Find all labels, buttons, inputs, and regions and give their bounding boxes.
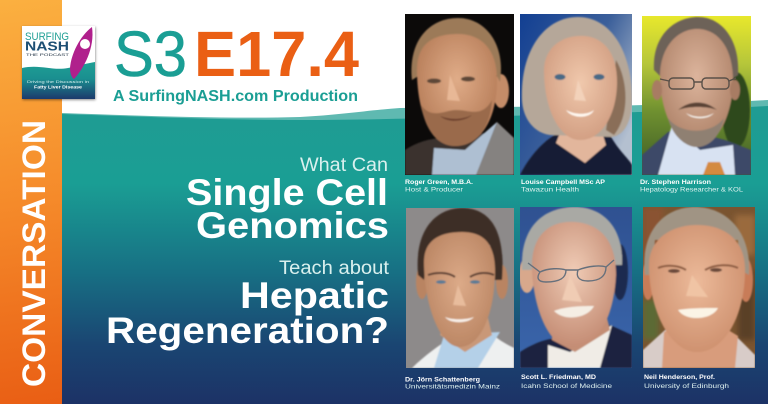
caption: Louise Campbell: Louise Campbell MSc AP: [521, 180, 605, 186]
episode: E17.4: [194, 18, 359, 90]
logo surfboard: [70, 27, 93, 79]
caption: Stephen Harrison: [640, 180, 744, 194]
caption: Neil Henderson: Neil Henderson, Prof.: [644, 375, 715, 381]
caption: Louise Campbell: [521, 180, 605, 194]
headline line: Genomics: Genomics: [196, 205, 389, 246]
glasses: [660, 78, 736, 89]
caption: Jörn Schattenberg: Dr. Jörn Schattenberg: [405, 378, 480, 384]
caption: Stephen Harrison: Hepatology Researcher & KOL: [640, 186, 744, 194]
caption: Roger Green: Roger Green, M.B.A.: [405, 180, 473, 186]
episode code: [114, 18, 359, 90]
headline line: Single Cell: Single Cell: [186, 172, 388, 213]
portrait: Roger Green: [405, 14, 514, 175]
sea gradient panel with wave top: [62, 100, 768, 404]
logo lower wave: [22, 62, 95, 99]
glasses: [528, 260, 614, 282]
caption: Stephen Harrison: Dr. Stephen Harrison: [640, 180, 711, 186]
caption row 2: [405, 375, 730, 390]
caption row 1: [405, 180, 744, 194]
orange side bar: [0, 0, 62, 404]
logo subtitle: Driving the Discussion in: [27, 79, 89, 84]
headline line: Teach about: Teach about: [279, 258, 390, 279]
podcast logo: [22, 26, 95, 99]
season: S3: [114, 18, 187, 90]
headline: [106, 155, 390, 351]
caption: Roger Green: [405, 180, 473, 194]
portrait: Neil Henderson: [642, 207, 755, 368]
caption: Roger Green: Host & Producer: [405, 186, 463, 194]
portrait: Stephen Harrison: [642, 16, 751, 175]
logo tagline: THE PODCAST: [26, 52, 70, 57]
logo title SURFING: SURFING: [25, 31, 69, 43]
caption: Scott Friedman: Scott L. Friedman, MD: [521, 375, 597, 381]
portrait: Jörn Schattenberg: [406, 208, 514, 368]
portrait: Scott Friedman: [519, 207, 632, 368]
caption: Jörn Schattenberg: [405, 378, 500, 390]
vertical label: CONVERSATION: CONVERSATION: [16, 120, 52, 387]
headline line: Regeneration?: Regeneration?: [106, 310, 389, 351]
headline line: Hepatic: Hepatic: [240, 275, 389, 316]
caption: Jörn Schattenberg: Universitätsmedizin Mainz: [405, 384, 500, 390]
logo subtitle bold: Fatty Liver Disease: [34, 84, 83, 90]
caption: Scott Friedman: Icahn School of Medicine: [521, 383, 613, 390]
headline line: What Can: What Can: [300, 155, 388, 176]
logo title NASH: NASH: [25, 38, 69, 54]
production credit: A SurfingNASH.com Production: [113, 88, 358, 105]
caption: Neil Henderson: University of Edinburgh: [644, 383, 730, 390]
portrait: Louise Campbell: [520, 14, 632, 175]
logo wave mark: [80, 39, 90, 49]
caption: Louise Campbell: Tawazun Health: [521, 186, 580, 194]
caption: Neil Henderson: [644, 375, 730, 390]
caption: Scott Friedman: [521, 375, 613, 390]
